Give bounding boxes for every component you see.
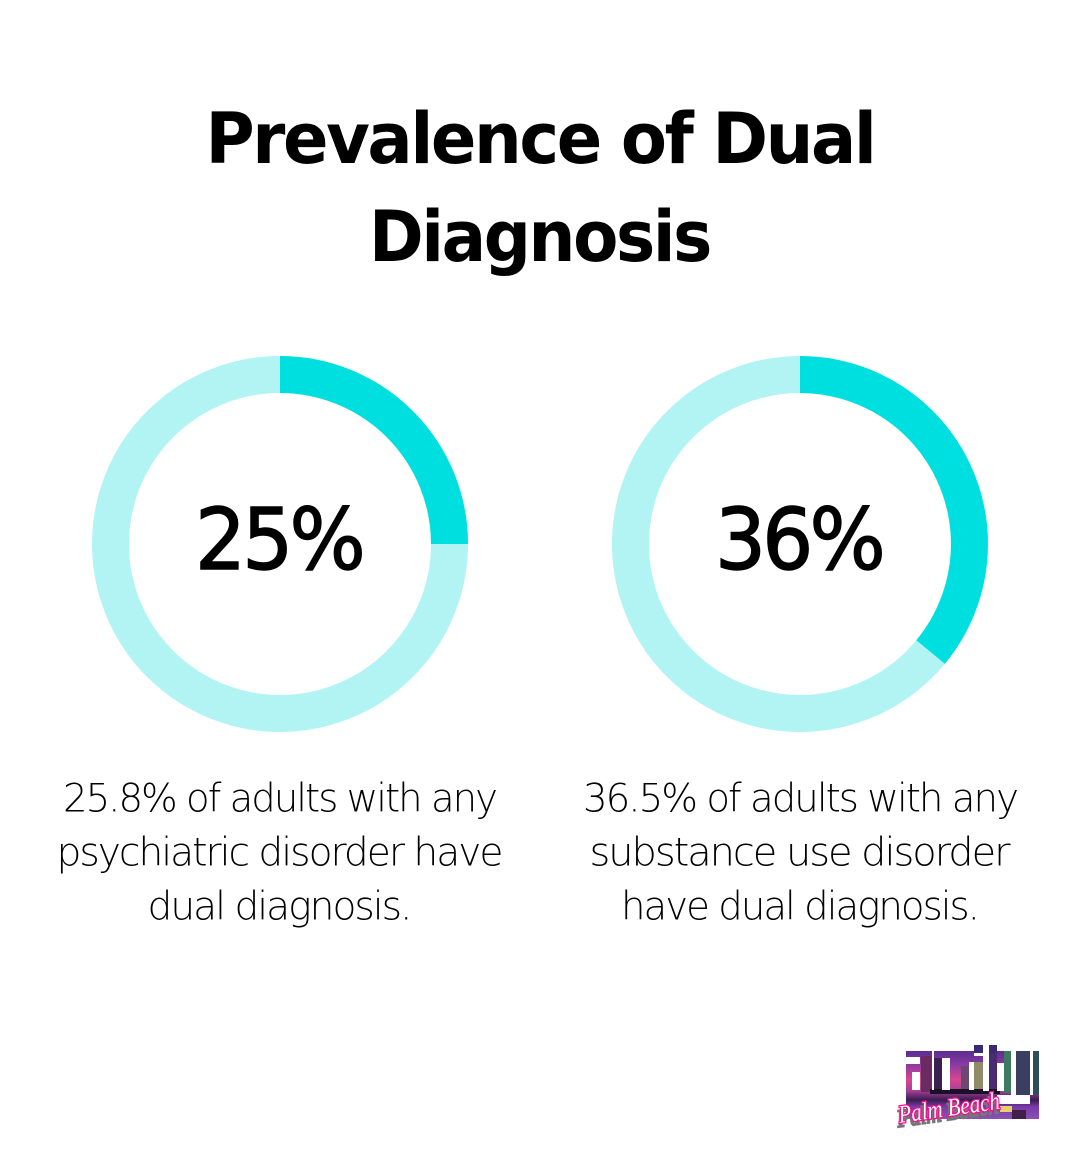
title (206, 98, 874, 278)
description: substance use disorder (583, 776, 1017, 930)
logo: Amity Palm Beach (894, 1045, 1039, 1133)
logo script: Palm Beach: Palm Beach (896, 1088, 1001, 1129)
logo script: Palm Beach: Palm Beach (894, 1092, 1000, 1133)
description: psychiatric disorder: dual diagnosis. (148, 884, 410, 930)
stat value: 25%: 25% (195, 491, 362, 590)
stat value: 36%: 36% (715, 491, 882, 590)
donut chart: 25 percent (110, 374, 450, 714)
description: substance use disorder: 36.5% of adults with any (583, 776, 1017, 822)
description: psychiatric disorder (56, 776, 502, 930)
donut chart: 36 percent (630, 374, 970, 714)
description: substance use disorder: have dual diagnosis. (621, 884, 978, 930)
title: Diagnosis (369, 196, 710, 278)
title: Prevalence of Dual (206, 98, 874, 180)
description: substance use disorder: substance use disorder (590, 830, 1011, 876)
description: psychiatric disorder: psychiatric disorder have (56, 830, 502, 876)
description: psychiatric disorder: 25.8% of adults with any (63, 776, 496, 822)
panel: substance use disorder statistic (583, 374, 1017, 930)
panel: psychiatric disorder statistic (56, 374, 502, 930)
